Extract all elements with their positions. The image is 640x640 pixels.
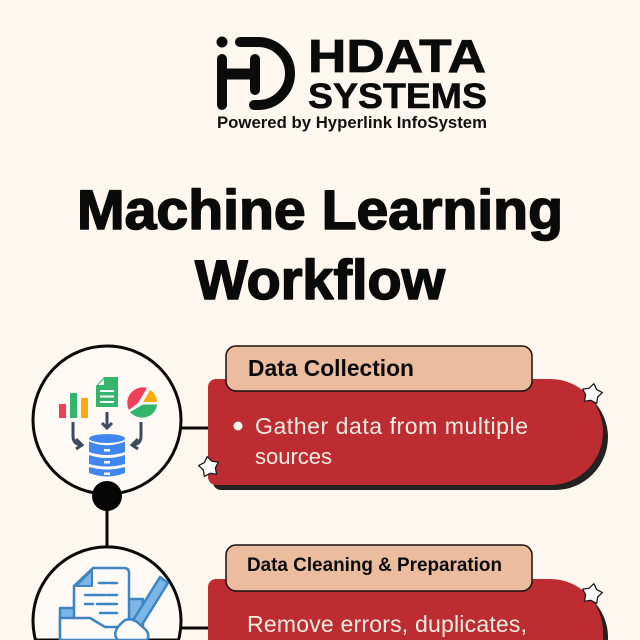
panel shadow (213, 584, 608, 640)
timeline node (92, 481, 122, 511)
star top right (581, 382, 604, 404)
panel text: Remove errors, duplicates, (247, 611, 527, 637)
icon: document (96, 377, 118, 407)
panel text (255, 413, 528, 469)
step 2 circle (33, 547, 181, 640)
icon: database (89, 434, 125, 476)
panel shadow (213, 384, 608, 490)
panel body (208, 579, 603, 640)
step 1 circle (33, 346, 181, 494)
icon: pie chart (127, 387, 157, 418)
panel text: sources (255, 444, 332, 469)
logo wordmark: HDATA (308, 30, 486, 82)
title line 1: Machine Learning (77, 178, 563, 241)
icon: brush handle (132, 577, 168, 628)
icon: brush head (115, 619, 148, 640)
star bottom left (197, 455, 220, 477)
panel heading: Data Collection (248, 355, 414, 381)
logo wordmark second line: SYSTEMS (308, 77, 487, 116)
icon: folder front (60, 618, 118, 640)
bullet (234, 422, 242, 430)
panel heading tab (226, 346, 532, 391)
icon: document (74, 568, 129, 630)
logo mark (216, 36, 290, 105)
logo (216, 30, 487, 132)
icon: data collection (59, 377, 157, 476)
panel: data cleaning and preparation (208, 545, 608, 640)
icon: bar chart (59, 393, 88, 418)
panel body (208, 379, 603, 485)
panel text: Gather data from multiple (255, 413, 528, 439)
timeline connectors (107, 428, 210, 628)
icon: data cleaning (60, 568, 168, 640)
star top right (581, 582, 604, 604)
panel heading tab (226, 545, 532, 591)
panel: data collection (197, 346, 608, 490)
panel heading: Data Cleaning & Preparation (247, 555, 502, 576)
icon: document lines (85, 583, 117, 613)
icon: folder back (60, 599, 143, 640)
icon: arrows (73, 412, 141, 449)
title line 2: Workflow (195, 248, 445, 311)
title (77, 178, 563, 311)
icon: document corner (76, 570, 92, 586)
logo tagline: Powered by Hyperlink InfoSystem (217, 113, 487, 132)
